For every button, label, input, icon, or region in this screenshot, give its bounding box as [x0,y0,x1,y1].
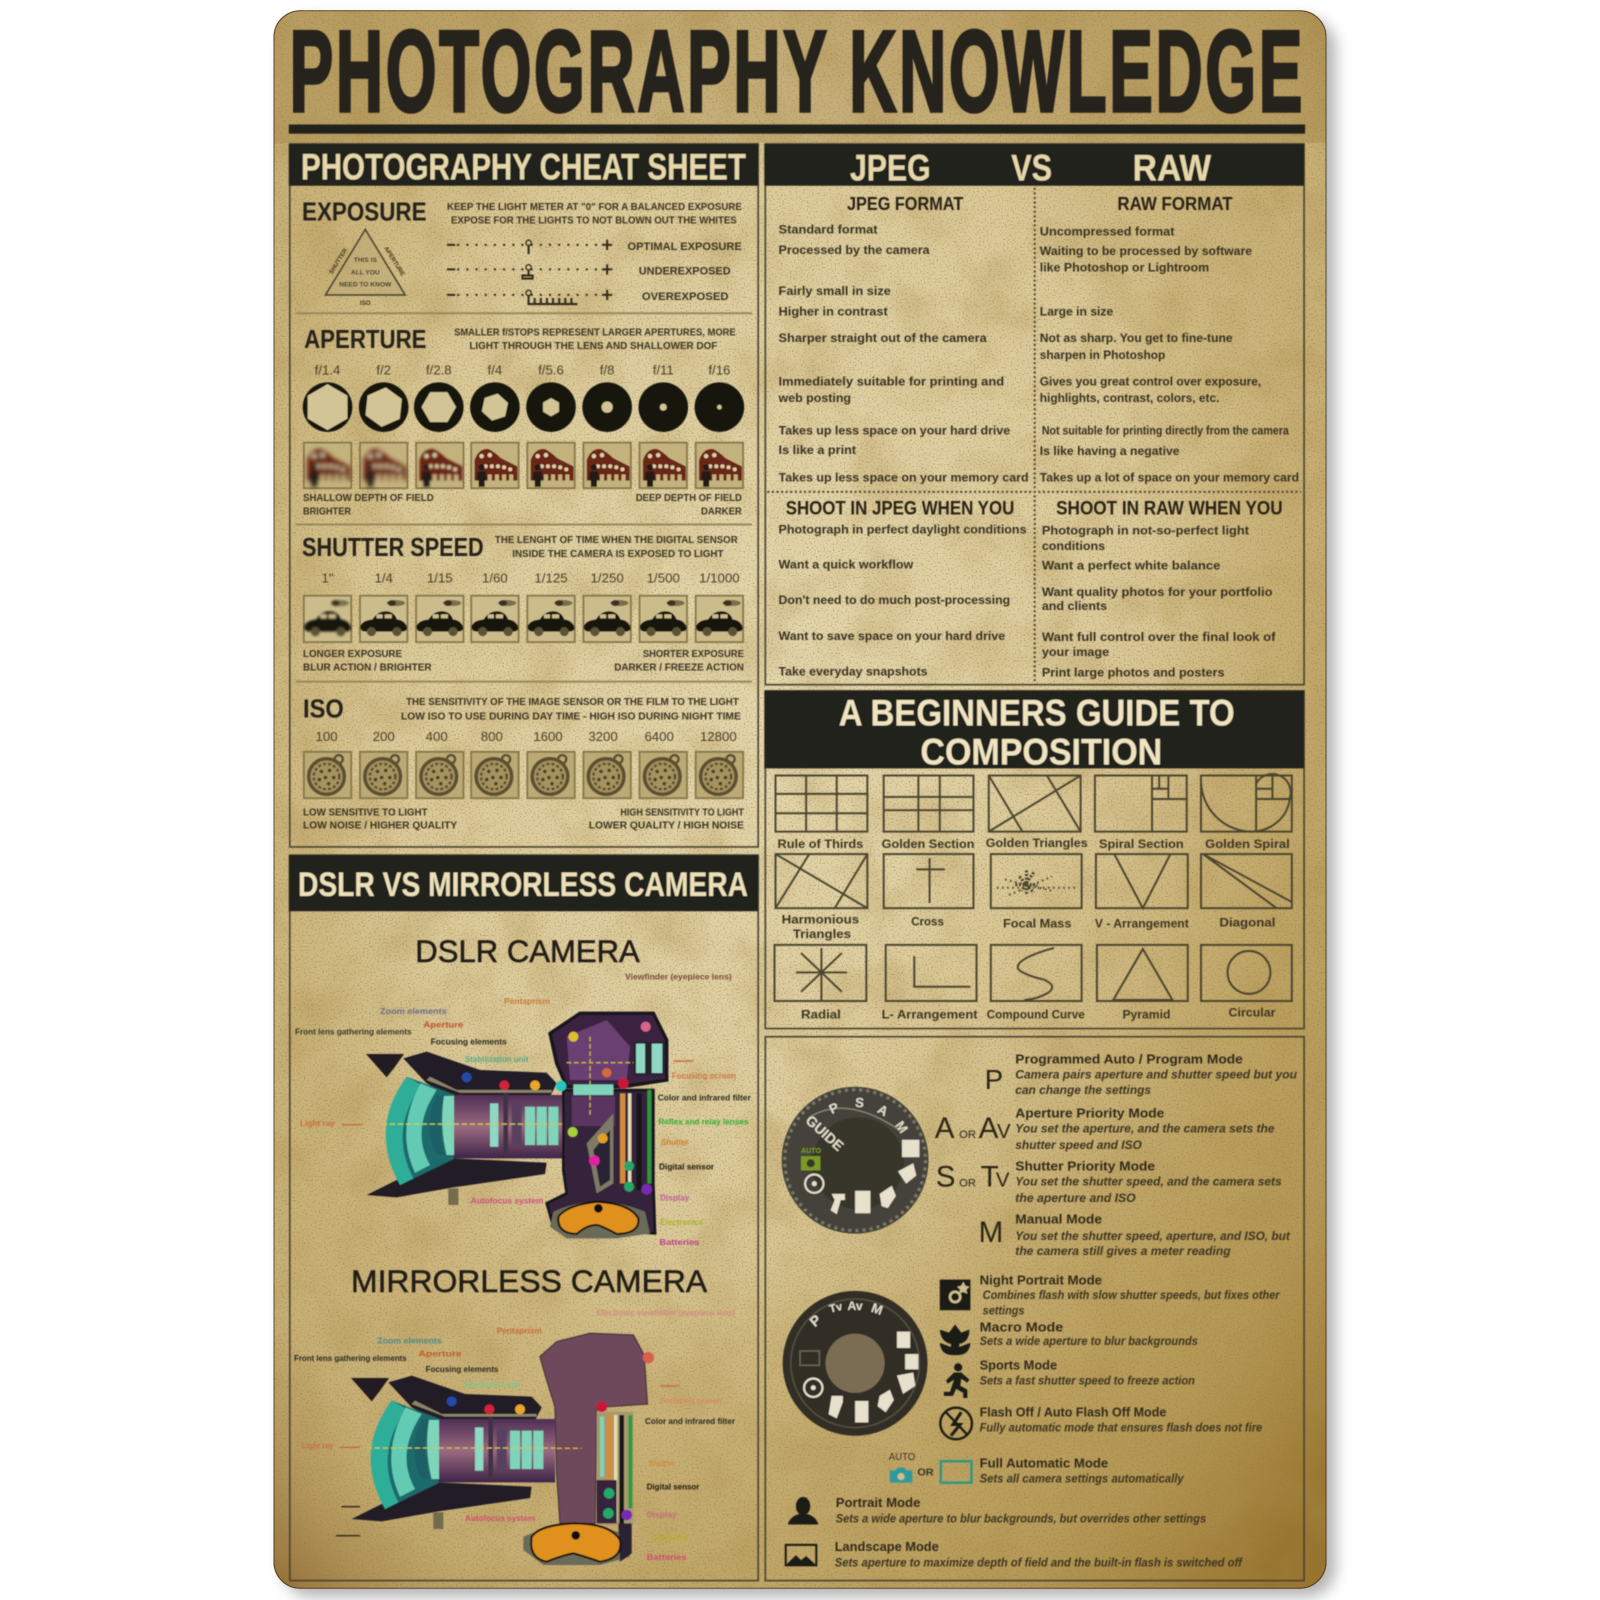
dslr part labels: Display [660,1193,690,1203]
text block: scene modes: Combines flash with slow shutter speeds, but fixes other [983,1288,1281,1302]
composition: rule of thirds: Rule of Thirds [778,837,863,851]
mode letters: V [997,1121,1011,1143]
composition: diagonal: Diagonal [1219,916,1276,930]
composition: golden section [882,776,974,851]
text block: raw format: highlights, contrast, colors, etc. [1040,391,1219,405]
section: exposure: OPTIMAL EXPOSURE [628,241,742,253]
section: iso: LOW NOISE / HIGHER QUALITY [303,821,457,832]
icon: scene dial: P [807,1312,825,1331]
light meter scales [447,240,612,304]
metal sign card with aged paper texture [273,10,1327,1589]
section: exposure: OVEREXPOSED [642,291,729,303]
f-stop labels: f/2.8 [426,362,452,377]
text block: raw format: Waiting to be processed by software [1040,244,1252,258]
section: shutter speed: DARKER / FREEZE ACTION [614,662,744,673]
section: aperture: BRIGHTER [303,506,352,517]
text block: jpeg format: Is like a print [779,443,856,457]
shutter speed labels: 1" [322,571,334,586]
composition: compound curve: Compound Curve [987,1007,1085,1021]
iso value labels: 400 [426,729,448,744]
heading: mirrorless camera: MIRRORLESS CAMERA [351,1263,708,1299]
composition: golden section: Golden Section [882,837,974,851]
section: iso: LOW SENSITIVE TO LIGHT [303,807,428,818]
iso value labels: 1600 [533,729,563,744]
f-stop labels: f/8 [600,362,615,377]
dslr part labels: Front lens gathering elements [295,1026,412,1036]
heading: composition [764,691,1304,772]
panel: composition guide [764,691,1304,1029]
composition: cross: Cross [911,915,944,929]
heading: jpeg vs raw: RAW [1133,148,1212,189]
mirrorless part labels: Pentaprism [497,1325,542,1335]
text block: jpeg format [778,193,1029,485]
text block: raw format: Large in size [1040,304,1113,318]
text block: shoot in jpeg: SHOOT IN JPEG WHEN YOU [786,497,1014,519]
dslr part labels: Focusing elements [431,1036,507,1046]
mirrorless part labels: Light ray [302,1440,333,1450]
mode letters: V [996,1170,1010,1192]
text block: raw format: Is like having a negative [1040,444,1180,458]
composition: focal mass [991,854,1082,931]
text block: scene modes: Fully automatic mode that ensures flash does not fire [980,1421,1262,1435]
iso value labels: 200 [373,729,395,744]
section: shutter speed: LONGER EXPOSURE [303,649,402,660]
section: shutter speed [302,534,744,673]
composition: pyramid [1097,945,1188,1021]
f-stop labels: f/16 [708,362,730,377]
text block: shoot in raw: Want a perfect white balance [1042,558,1221,572]
composition: golden triangles [986,776,1088,850]
text block: shoot in raw: Want quality photos for your portfolio [1042,585,1272,599]
text block: creative modes: Manual Mode [1015,1211,1102,1226]
mirrorless part labels: Autofocus system [465,1513,535,1523]
mirrorless part labels: Color and infrared filter [645,1416,736,1426]
mode letters: A [935,1112,955,1145]
heading: composition: A BEGINNERS GUIDE TO [839,693,1235,734]
text block: portrait and landscape: Portrait Mode [836,1495,920,1510]
text block: jpeg format: Immediately suitable for printing and [779,375,1004,389]
text block: raw format: Gives you great control over exposure, [1040,375,1261,389]
section: shutter speed: SHUTTER SPEED [302,534,484,562]
text block: scene modes: Night Portrait Mode [980,1273,1102,1288]
icon: exposure triangle: NEED TO KNOW [339,282,392,289]
text block: scene modes: Sports Mode [980,1357,1057,1372]
composition: golden spiral: Golden Spiral [1205,837,1290,851]
text block: creative modes: You set the shutter speed, and the camera sets [1015,1175,1282,1189]
section: exposure: EXPOSURE [302,198,427,226]
dslr part labels: Light ray [300,1118,335,1128]
iso value labels: 6400 [644,729,674,744]
text block: shoot in jpeg [779,497,1027,679]
mode letters: T [981,1161,999,1194]
shutter speed labels: 1/500 [647,571,680,586]
text block: creative modes: the aperture and ISO [1015,1191,1136,1205]
composition: pyramid: Pyramid [1122,1007,1170,1021]
iso value labels: 800 [481,729,503,744]
text block: scene modes [980,1273,1281,1486]
section: iso: THE SENSITIVITY OF THE IMAGE SENSOR OR THE FILM TO THE LIGHT [406,697,740,708]
text block: raw format: RAW FORMAT [1117,193,1233,214]
heading: jpeg vs raw: JPEG [850,148,931,189]
icon: creative dial: GUIDE [802,1113,846,1155]
iso value labels [315,729,737,744]
composition: compound curve [987,945,1085,1021]
text block: creative modes: Aperture Priority Mode [1015,1105,1164,1120]
dslr part labels: Stabilization unit [465,1054,528,1064]
dslr part labels [295,971,751,1247]
dslr part labels: Shutter [661,1137,689,1147]
text block: scene modes: Sets a fast shutter speed to freeze action [980,1374,1195,1388]
text block: raw format: Takes up a lot of space on your memory card [1040,471,1299,485]
diagram: dslr camera cutaway [295,971,751,1247]
text block: jpeg format: Takes up less space on your hard drive [779,424,1010,438]
section: exposure: KEEP THE LIGHT METER AT "0" FOR A BALANCED EXPOSURE [447,202,742,213]
heading: jpeg vs raw [764,144,1304,189]
icon: exposure triangle: APERTURE [382,245,406,278]
dslr part labels: Color and infrared filter [658,1093,751,1103]
section: aperture [303,326,744,517]
mirrorless part labels: Front lens gathering elements [294,1353,407,1363]
panel: camera modes [765,1037,1304,1581]
dslr part labels: Reflex and relay lenses [658,1117,749,1127]
mirrorless part labels: Focusing elements [426,1364,499,1374]
mode letters: S [936,1161,955,1194]
composition: v arrangement: V - Arrangement [1095,917,1189,931]
f-stop labels: f/2 [376,362,391,377]
text block: shoot in jpeg: Want a quick workflow [779,557,914,571]
composition: spiral section: Spiral Section [1099,837,1184,851]
heading: dslr camera: DSLR CAMERA [415,933,641,969]
dslr part labels: Pentaprism [504,996,550,1006]
icons: sensor noise [304,752,743,798]
heading: composition: COMPOSITION [920,731,1162,772]
iso value labels: 3200 [588,729,618,744]
text block: scene modes: Full Automatic Mode [980,1455,1108,1470]
composition: harmonious triangles: Triangles [793,927,851,941]
f-stop labels: f/11 [653,362,674,377]
text block: raw format: Uncompressed format [1040,225,1174,239]
section: shutter speed: SHORTER EXPOSURE [643,649,744,660]
section: exposure [302,198,742,307]
text block: creative modes [1015,1051,1297,1258]
mirrorless part labels: Electronics [652,1532,689,1542]
heading: dslr vs mirrorless: DSLR VS MIRRORLESS CAMERA [298,866,748,904]
icon: creative dial: AUTO [801,1147,822,1155]
dslr part labels: Focusing screen [672,1071,736,1081]
dslr part labels: Batteries [659,1237,700,1247]
icon: scene dial: Tv [828,1301,845,1316]
text block: shoot in jpeg: Photograph in perfect daylight conditions [779,523,1027,537]
title rule [289,124,1305,134]
mirrorless part labels: Batteries [647,1552,687,1562]
text block: creative modes: Shutter Priority Mode [1015,1158,1155,1173]
text block: creative modes: Camera pairs aperture and shutter speed but you [1015,1068,1297,1082]
dslr part labels: Viewfinder (eyepiece lens) [625,971,732,981]
mirrorless part labels [294,1308,736,1562]
icon: exposure triangle: THIS IS [354,257,377,264]
section: shutter speed: BLUR ACTION / BRIGHTER [303,662,432,673]
icon: night portrait [940,1280,970,1310]
icon: creative dial: P [827,1099,841,1117]
icon: scene dial: M [869,1300,885,1318]
text block: shoot in jpeg: Want to save space on your hard drive [779,629,1005,643]
text block: raw format: like Photoshop or Lightroom [1040,260,1209,274]
heading: jpeg vs raw: VS [1011,148,1052,189]
panel: photography cheat sheet [289,144,758,847]
text block: scene modes: Sets all camera settings automatically [980,1472,1185,1486]
shutter speed labels: 1/60 [482,571,508,586]
icon: exposure triangle [326,230,406,307]
icon: sports runner [944,1363,969,1398]
icon: scene dial [783,1291,928,1436]
text block: jpeg format: Takes up less space on your memory card [779,471,1029,485]
section: iso: LOWER QUALITY / HIGH NOISE [589,821,744,832]
text block: jpeg format: Standard format [779,223,878,237]
dslr part labels: Zoom elements [380,1006,447,1016]
page content [289,8,1305,1581]
icon: scene dial: Av [848,1299,863,1313]
icons: car motion blur [304,596,743,642]
section: shutter speed: INSIDE THE CAMERA IS EXPOSED TO LIGHT [512,549,724,560]
text block: shoot in raw: Photograph in not-so-perfect light [1042,524,1249,538]
section: iso: HIGH SENSITIVITY TO LIGHT [620,807,745,818]
section: aperture: DARKER [701,506,742,517]
mirrorless part labels: Electronic viewfinder (eyepiece lens) [597,1308,735,1318]
text block: scene modes: Sets a wide aperture to blur backgrounds [980,1334,1198,1348]
icon: creative dial: A [875,1101,891,1119]
text block: jpeg format: JPEG FORMAT [847,193,964,214]
text block: raw format [1040,193,1299,485]
card shadow [283,18,1336,1597]
section: iso [303,695,745,832]
mode letters [935,1064,1011,1249]
text block: scene modes: settings [983,1303,1025,1317]
text block: shoot in raw: conditions [1042,539,1105,553]
section: iso: LOW ISO TO USE DURING DAY TIME - HIGH ISO DURING NIGHT TIME [401,711,741,722]
text block: shoot in raw: and clients [1042,599,1107,613]
heading: cheat sheet: PHOTOGRAPHY CHEAT SHEET [301,147,746,188]
icons: aperture blades [303,382,744,432]
icon: exposure triangle: SHUTTER [328,247,349,276]
mode letters: M [979,1216,1003,1249]
text block: creative modes: You set the shutter speed, aperture, and ISO, but [1015,1229,1291,1243]
text block: shoot in raw: your image [1042,645,1109,659]
section: aperture: SHALLOW DEPTH OF FIELD [303,493,434,504]
composition: radial [774,945,866,1021]
text block: raw format: Not as sharp. You get to fine-tune [1040,331,1233,345]
mirrorless part labels: Focusing screen [660,1395,722,1405]
composition: golden triangles: Golden Triangles [986,836,1088,850]
composition: circular: Circular [1229,1005,1276,1019]
text block: shoot in raw: SHOOT IN RAW WHEN YOU [1056,497,1283,519]
section: iso: ISO [303,695,344,723]
iso value labels: 12800 [700,729,737,744]
text block: creative modes: can change the settings [1015,1083,1151,1097]
composition: focal mass: Focal Mass [1003,917,1072,931]
shutter speed labels: 1/4 [374,571,393,586]
text block: portrait and landscape: Sets a wide aperture to blur backgrounds, but overrides other settings [836,1511,1206,1525]
composition: l arrangement: L- Arrangement [882,1007,978,1021]
f-stop labels: f/5.6 [538,362,564,377]
shutter speed labels: 1/250 [591,571,624,586]
icon: landscape [786,1545,816,1565]
text block: portrait and landscape [835,1495,1244,1569]
text block: creative modes: the camera still gives a meter reading [1015,1244,1231,1258]
mode letters: OR [959,1129,976,1141]
dslr part labels: Aperture [423,1020,464,1030]
icon: creative dial: M [892,1118,911,1136]
section: aperture: APERTURE [304,326,427,354]
icon: flash off [940,1408,972,1439]
icon: exposure triangle: ISO [360,300,371,307]
text block: jpeg format: Processed by the camera [779,243,930,257]
composition: harmonious triangles: Harmonious [782,912,859,926]
text block: scene modes: Flash Off / Auto Flash Off Mode [980,1404,1166,1419]
text block: creative modes: shutter speed and ISO [1015,1138,1142,1152]
icons: depth of field scenes [304,443,743,488]
mirrorless part labels: Zoom elements [377,1335,442,1345]
icon: macro flower [940,1324,970,1355]
text block: jpeg format: Higher in contrast [779,304,888,318]
text block: jpeg format: web posting [778,391,851,405]
shutter speed labels: 1/1000 [699,571,740,586]
section: aperture: LIGHT THROUGH THE LENS AND SHALLOWER DOF [469,341,717,352]
composition: harmonious triangles [776,854,867,941]
section: shutter speed: THE LENGHT OF TIME WHEN THE DIGITAL SENSOR [495,535,738,546]
panel: jpeg vs raw [764,144,1304,685]
mode letters: P [985,1064,1003,1095]
diagram: mirrorless camera cutaway [294,1308,736,1565]
composition: l arrangement [882,945,978,1021]
composition: v arrangement [1095,854,1189,931]
text block: creative modes: Programmed Auto / Program Mode [1015,1051,1243,1066]
icon: creative dial: S [855,1095,865,1111]
composition: diagonal [1201,854,1292,930]
icon: full auto camera or rectangle: AUTO [889,1452,915,1463]
shutter speed labels: 1/125 [534,571,568,586]
text block: raw format: Not suitable for printing directly from the camera [1042,424,1289,438]
text block: shoot in jpeg: Don't need to do much post-processing [779,593,1010,607]
mirrorless part labels: Stabilization unit [463,1380,520,1390]
f-stop labels [315,362,730,377]
section: exposure: EXPOSE FOR THE LIGHTS TO NOT BLOWN OUT THE WHITES [451,215,737,226]
text block: jpeg format: Sharper straight out of the camera [779,331,987,345]
text block: shoot in raw [1042,497,1283,680]
text block: portrait and landscape: Landscape Mode [835,1539,939,1554]
dslr part labels: Autofocus system [471,1195,544,1205]
text block: shoot in raw: Print large photos and posters [1042,666,1225,680]
shutter speed labels [322,571,740,586]
composition: rule of thirds [776,776,867,851]
mode letters: A [979,1112,999,1145]
mirrorless part labels: Display [647,1510,677,1520]
icon: creative dial [782,1087,929,1234]
icon: full auto camera or rectangle: OR [917,1468,934,1479]
text block: jpeg format: Fairly small in size [779,284,891,298]
dslr part labels: Electronics [660,1217,704,1227]
section: aperture: DEEP DEPTH OF FIELD [636,493,742,504]
text block: scene modes: Macro Mode [980,1320,1063,1335]
icon: exposure triangle: ALL YOU [351,269,380,276]
text block: shoot in raw: Want full control over the final look of [1042,630,1276,644]
section: aperture: SMALLER f/STOPS REPRESENT LARGER APERTURES, MORE [454,328,736,339]
mirrorless part labels: Digital sensor [647,1481,700,1491]
composition: cross [884,854,973,929]
dslr part labels: Digital sensor [659,1161,715,1171]
icon: full auto camera or rectangle [889,1452,971,1483]
text block: portrait and landscape: Sets aperture to maximize depth of field and the built-in flash is switched off [835,1555,1244,1569]
icon: portrait [788,1497,818,1524]
composition: radial: Radial [801,1007,841,1021]
text block: raw format: sharpen in Photoshop [1040,348,1165,362]
f-stop labels: f/4 [488,362,502,377]
mirrorless part labels: Shutter [648,1458,676,1468]
shutter speed labels: 1/15 [427,571,453,586]
text block: creative modes: You set the aperture, and the camera sets the [1015,1122,1275,1136]
iso value labels: 100 [315,729,338,744]
section: exposure: UNDEREXPOSED [639,265,731,277]
composition: circular [1201,945,1292,1019]
text block: shoot in jpeg: Take everyday snapshots [779,665,928,679]
mode letters: OR [959,1178,976,1190]
mirrorless part labels: Aperture [418,1349,462,1359]
composition: golden spiral [1201,774,1292,851]
heading: dslr vs mirrorless [289,855,758,911]
composition: spiral section [1095,776,1187,851]
panel: dslr vs mirrorless [289,855,758,1581]
f-stop labels: f/1.4 [315,362,340,377]
